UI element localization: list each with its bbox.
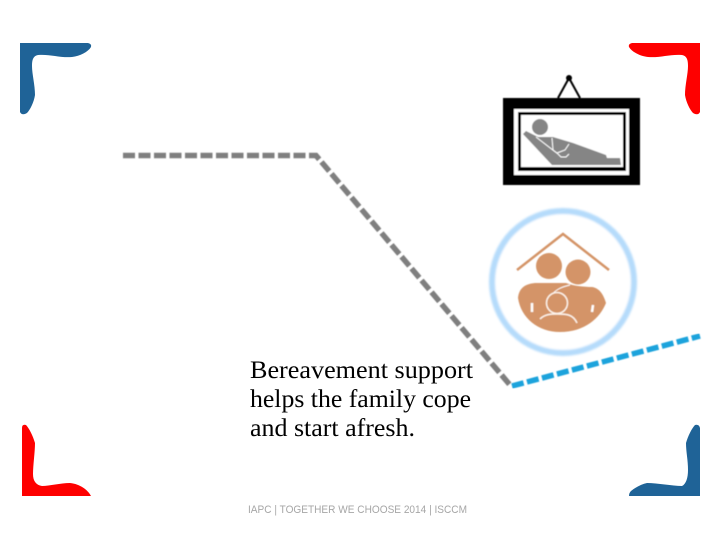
text: bereavement support message bbox=[250, 357, 473, 442]
text: bereavement support message: helps the family cope bbox=[250, 386, 471, 413]
corner bracket: bottom right blue bbox=[629, 425, 700, 496]
text: bereavement support message: and start afresh. bbox=[250, 415, 415, 442]
footer text: IAPC | TOGETHER WE CHOOSE 2014 | ISCCM bbox=[248, 504, 467, 516]
dashed line: grey decline trajectory bbox=[123, 156, 510, 385]
icon: family under a roof in a blue ring bbox=[492, 211, 634, 353]
text: bereavement support message: Bereavement support bbox=[250, 357, 473, 384]
corner bracket: top right red bbox=[629, 43, 700, 114]
corner bracket: bottom left red bbox=[22, 425, 91, 496]
icon: framed picture of patient in bed bbox=[503, 75, 640, 185]
corner bracket: top left blue bbox=[20, 43, 91, 114]
dashed line: blue recovery trajectory bbox=[512, 336, 700, 386]
